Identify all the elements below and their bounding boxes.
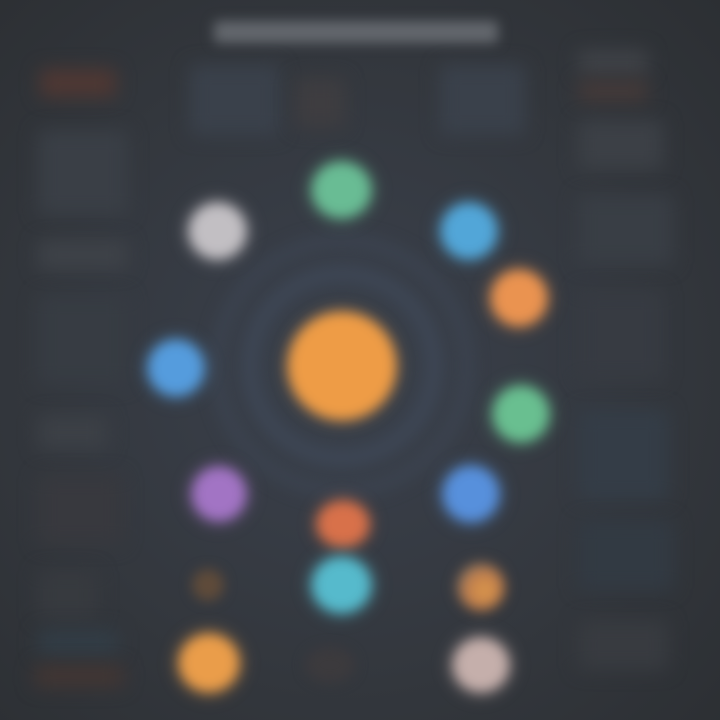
- icon: blue node lower right: [443, 466, 499, 522]
- icon: green node right: [493, 386, 549, 442]
- icon: cyan node: [312, 557, 371, 613]
- icon: blue node left: [148, 340, 204, 396]
- icon: dim brown node: [192, 569, 224, 601]
- icon: orange node bottom left: [179, 634, 239, 692]
- icon: red-orange node: [317, 501, 369, 547]
- panel: top center text columns: [191, 66, 524, 132]
- panel: left column: [35, 64, 120, 688]
- icon: multicolour node: [458, 564, 504, 610]
- icon: orange node right: [491, 270, 547, 326]
- icon: blue node top right: [441, 203, 497, 259]
- icon: purple node: [192, 467, 246, 521]
- chart: central orange node: [288, 312, 396, 420]
- panel: right column: [580, 50, 665, 656]
- icon: dim node bottom centre: [305, 647, 355, 683]
- icon: green node top: [312, 162, 371, 218]
- title bar: [214, 21, 498, 43]
- icon: white node: [189, 203, 246, 259]
- icon: pale node bottom right: [453, 638, 509, 692]
